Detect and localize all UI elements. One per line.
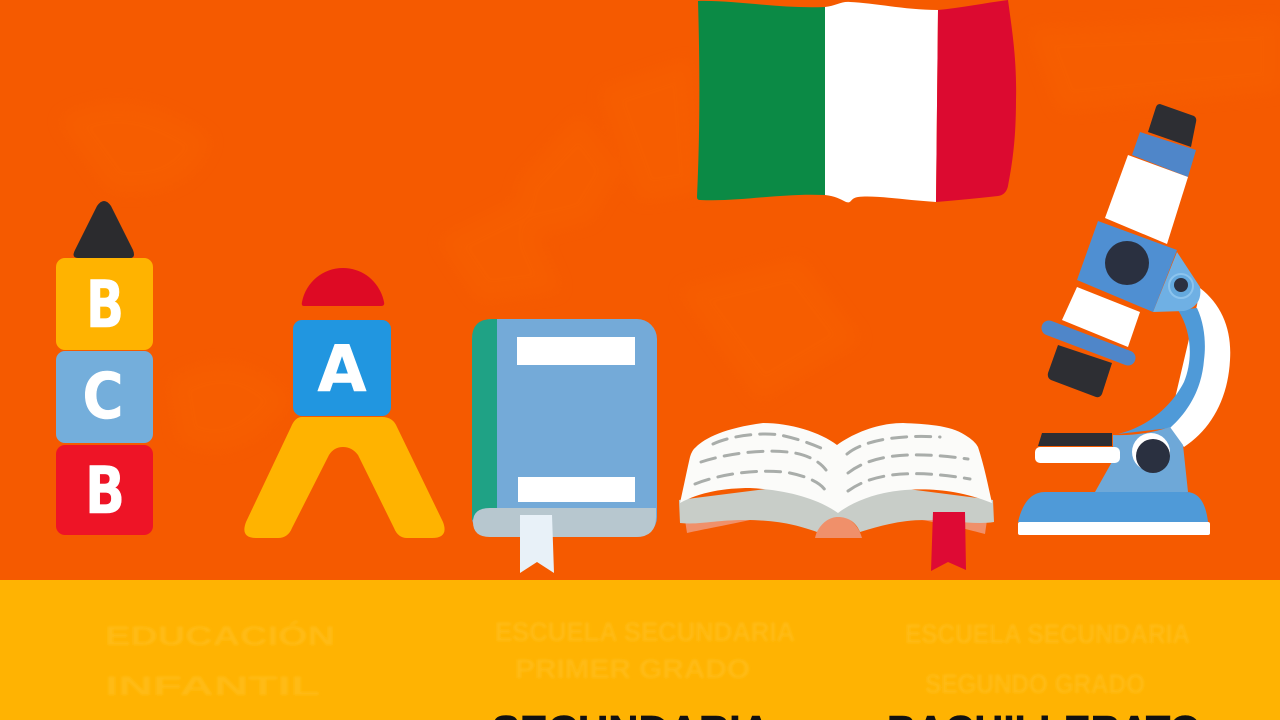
salmon right edge [922,520,987,534]
white base strip [1018,522,1210,535]
blue collar [1132,132,1196,177]
flag green stripe [697,1,825,200]
faint label middle: ESCUELA SECUNDARIA [495,617,795,647]
dark objective [1048,345,1112,397]
salmon spine [815,516,862,538]
icon: closed blue book [472,319,657,573]
flag of Italy [697,0,1016,202]
yellow legs [244,417,445,538]
bottom yellow band [0,580,1280,720]
faint label right: ESCUELA SECUNDARIA [905,619,1190,649]
text lines [695,434,970,491]
focus knob [1105,241,1149,285]
faint labels in yellow band [105,617,1190,701]
gray page edges [679,480,994,532]
arm stand [1095,427,1188,492]
blue body [1077,221,1177,312]
top label [517,337,635,365]
pale ribbon [520,515,554,573]
faint label right: SEGUNDO GRADO [925,669,1145,699]
yellow block B: B [86,268,124,343]
white pages [680,423,992,513]
upper white tube [1105,155,1188,244]
icon: open book [679,423,994,571]
icon: microscope [1018,104,1230,535]
yellow block B [56,258,153,350]
icon: stacked letter blocks [56,201,153,535]
faint label left [105,620,335,701]
pivot joint [1153,252,1200,312]
blue base [1018,492,1208,522]
faint label middle: PRIMER GRADO [515,654,750,684]
red bookmark [931,512,966,571]
stage white [1035,447,1120,463]
lower knob [1132,433,1170,473]
flag red stripe [936,0,1016,202]
red block B [56,445,153,535]
white outer arm [1168,288,1230,447]
faint label left: INFANTIL [105,671,320,701]
pivot screw [1169,274,1193,298]
icon: letter A tower [244,268,445,538]
faint label middle [495,617,795,684]
blue ring [1049,328,1128,358]
black cone [74,201,134,258]
flag white stripe [825,2,938,202]
blue block A: A [318,333,367,407]
blue inner arm [1118,308,1205,434]
red dome [302,268,384,306]
red block B: B [85,454,125,529]
faint label left: EDUCACIÓN [105,620,335,651]
blue block C [56,351,153,443]
stage dark [1038,433,1112,446]
blue block C: C [82,360,124,433]
blue block A [293,320,391,416]
faint label right [905,619,1190,699]
salmon left edge [685,520,750,533]
bottom label [518,477,635,502]
eyepiece [1148,104,1196,147]
lower white tube [1062,287,1140,347]
book cover [472,319,657,537]
green spine [472,319,497,520]
page block [473,508,656,537]
